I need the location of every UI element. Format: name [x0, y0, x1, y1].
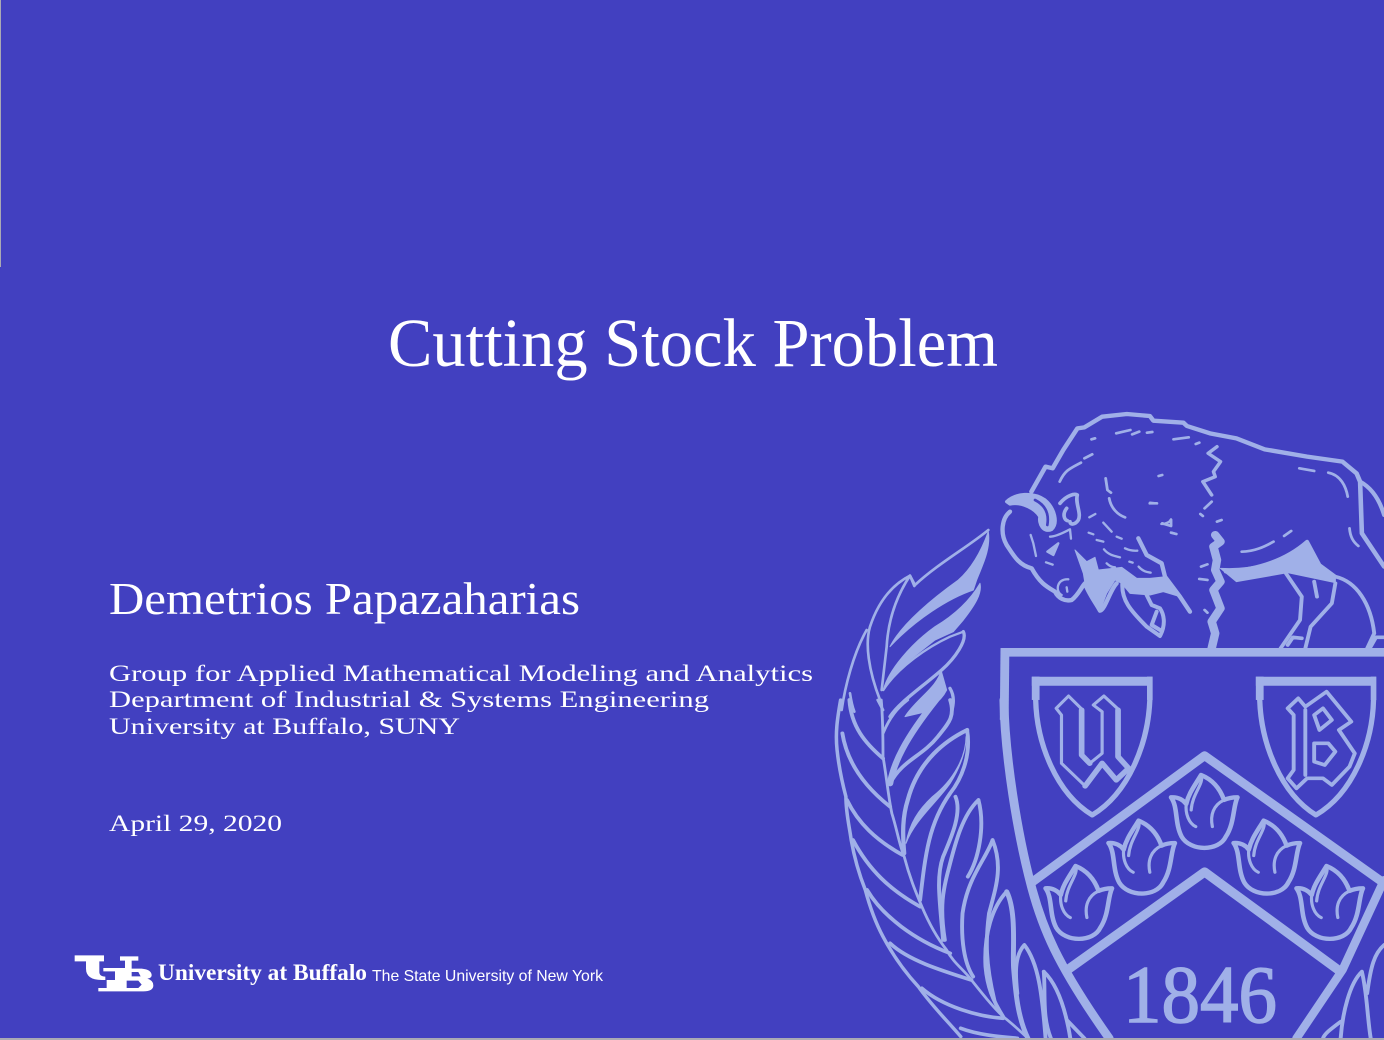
author affiliation [109, 661, 813, 739]
horn [1007, 495, 1055, 530]
laurel wreath upper branch [842, 530, 989, 717]
seal year: 1846 [1123, 949, 1277, 1040]
wordmark: University at Buffalo [158, 960, 367, 985]
B escutcheon [1260, 692, 1374, 815]
icon: UB monogram [75, 955, 153, 991]
university seal [836, 414, 1384, 1040]
raised foreleg [1122, 584, 1164, 636]
tulip centre [1171, 775, 1237, 848]
author affiliation: Group for Applied Mathematical Modeling and Analytics [109, 661, 813, 686]
tulip left [1108, 821, 1175, 894]
U escutcheon [1036, 696, 1150, 815]
seal lower half [836, 692, 1384, 1038]
tulip right [1234, 821, 1300, 894]
tulip far left [1046, 866, 1112, 939]
author affiliation: Department of Industrial & Systems Engineering [109, 687, 710, 712]
university logo and wordmark [75, 955, 604, 991]
author name: Demetrios Papazaharias [109, 574, 580, 624]
ear [1060, 494, 1079, 524]
mane band [1075, 550, 1180, 611]
shield frame [1001, 648, 1384, 720]
tagline: The State University of New York [372, 968, 604, 985]
author affiliation: University at Buffalo, SUNY [109, 714, 460, 739]
face [1003, 512, 1117, 611]
chest line [1138, 538, 1190, 612]
tulips [1046, 775, 1363, 939]
bison head and forelegs [1003, 494, 1190, 636]
facial marks [1031, 503, 1176, 595]
right laurel branch [1323, 945, 1384, 1038]
title: Cutting Stock Problem [388, 305, 998, 381]
tulip far right [1296, 866, 1363, 939]
shield outline and chevrons [1004, 700, 1384, 1038]
laurel leaves lower [836, 700, 1084, 1038]
bison body [1031, 414, 1384, 648]
date: April 29, 2020 [109, 811, 282, 836]
